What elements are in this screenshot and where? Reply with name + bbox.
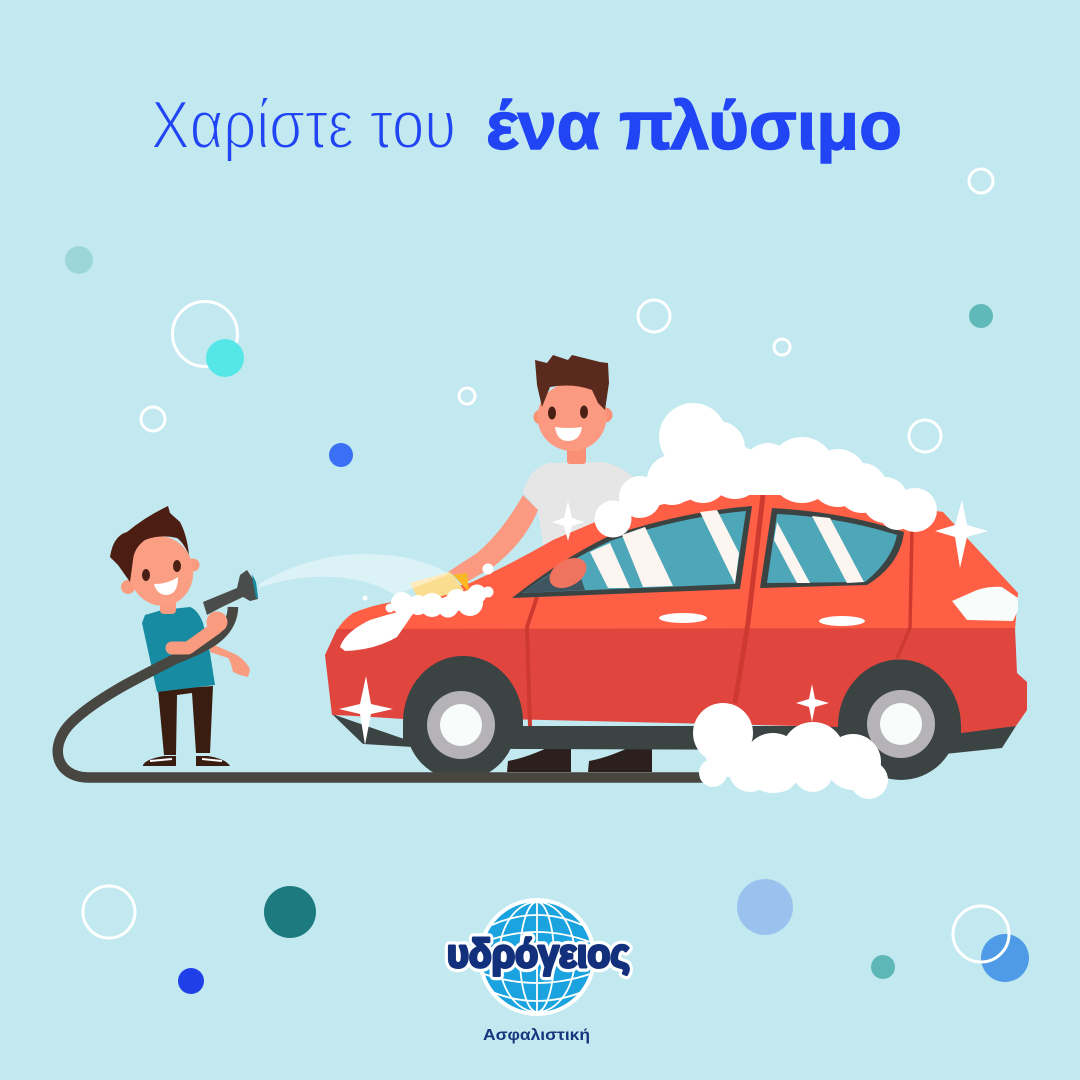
logo: wordmark: υδρόγειος — [447, 932, 630, 976]
car door lines — [527, 495, 912, 726]
boy front arm — [172, 612, 228, 648]
bottom foam — [693, 703, 888, 799]
tail light — [952, 587, 1018, 621]
car body upper — [337, 490, 1018, 630]
hood foam — [362, 564, 494, 618]
door handles — [659, 613, 865, 626]
decorative bubbles — [65, 169, 1029, 994]
man washing the car — [448, 355, 652, 772]
hose — [58, 607, 705, 778]
logo: wordmark: υδρόγειος — [447, 932, 630, 976]
red car — [325, 490, 1027, 780]
car lower skirt — [332, 714, 1016, 754]
water spray — [259, 554, 450, 595]
front window — [512, 506, 752, 598]
headlight — [340, 608, 417, 651]
sponge — [410, 572, 469, 602]
logo: subtitle: Ασφαλιστική — [483, 1027, 590, 1044]
logo: globe — [478, 898, 596, 1016]
title: Χαρίστε του — [151, 87, 456, 163]
title: ένα πλύσιμο — [486, 88, 902, 164]
car body lower — [325, 628, 1027, 733]
sparkles — [339, 500, 988, 745]
roof foam — [594, 403, 937, 538]
hose nozzle — [203, 570, 258, 615]
title — [151, 87, 902, 164]
rear window — [760, 508, 904, 588]
boy body — [110, 506, 250, 766]
car wheels — [403, 656, 961, 780]
